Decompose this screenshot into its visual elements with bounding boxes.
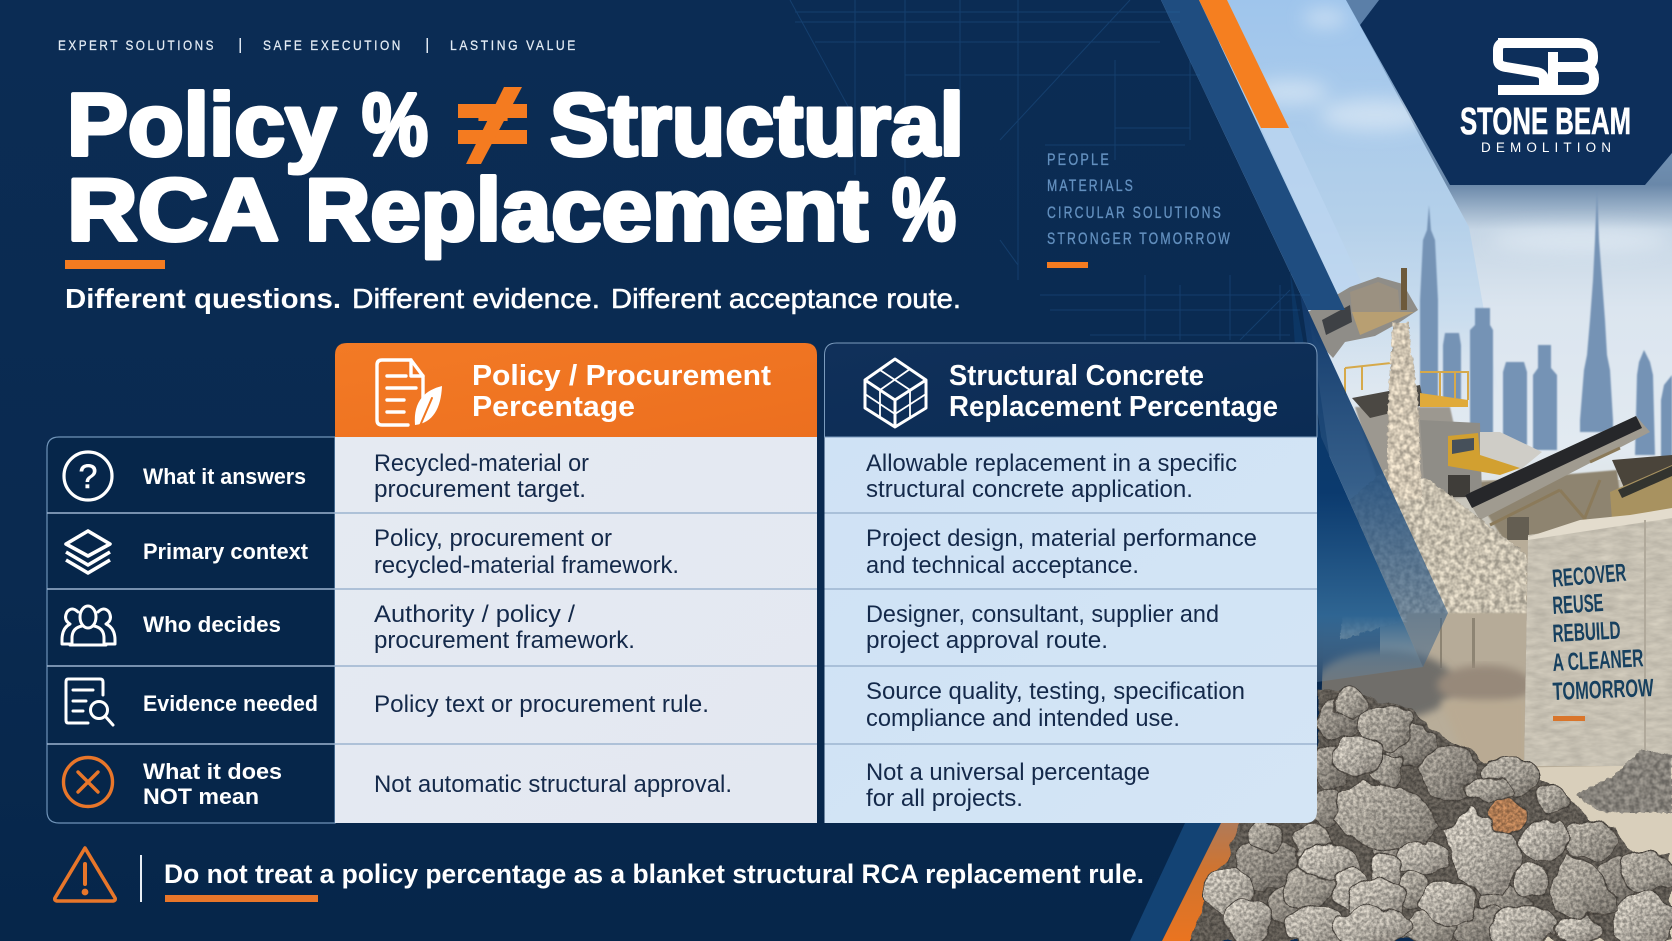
not-equal sign (458, 87, 527, 164)
row: evidence needed: compliance and intended use. (866, 705, 1180, 732)
logo panel (1346, 0, 1672, 185)
title (67, 75, 964, 259)
icon: structural cube (865, 359, 926, 427)
icon: question mark: ? (79, 458, 97, 496)
title: Policy (67, 75, 336, 174)
bottom orange stripe (1162, 823, 1246, 941)
row: primary context: Policy, procurement or (374, 525, 612, 552)
row: who decides: Authority / policy / (374, 601, 575, 628)
title: Replacement (305, 160, 868, 259)
light strip under orange stripe (1261, 128, 1365, 293)
row: evidence needed: Evidence needed (143, 691, 318, 716)
row: what it answers: procurement target. (374, 476, 586, 503)
heading: structural column (949, 360, 1278, 423)
panel: structural column header (824, 343, 1317, 437)
heading: policy column: Policy / Procurement (472, 360, 771, 392)
not-equal sign: ≠ (478, 93, 508, 156)
bottom blue band (1130, 823, 1221, 941)
logo mark (1498, 43, 1594, 90)
photo: city skyline (1420, 188, 1672, 458)
row: primary context: recycled-material framework. (374, 552, 679, 579)
icon: document with magnifier (66, 679, 113, 725)
row: what it does not mean: Not a universal percentage (866, 759, 1150, 786)
photo: ground and distant structures (1380, 470, 1672, 780)
side tagline (1047, 150, 1232, 268)
subtitle: Different evidence. (352, 283, 600, 314)
title: % (892, 160, 956, 259)
conveyor: main (1465, 416, 1650, 530)
icon: document with leaf (377, 360, 442, 428)
photo: sky (1150, 0, 1672, 560)
slogan (1551, 559, 1654, 706)
slogan: REUSE (1552, 589, 1604, 620)
side tagline: STRONGER TOMORROW (1047, 229, 1232, 248)
subtitle: Different acceptance route. (611, 283, 961, 314)
foreground rubble: ground (1490, 750, 1672, 941)
row: what it does not mean: What it does (143, 759, 282, 784)
title: % (362, 75, 428, 174)
title: Structural (550, 75, 964, 174)
row: what it does not mean: for all projects. (866, 785, 1023, 812)
row: primary context (66, 525, 1257, 579)
row: evidence needed (66, 678, 1245, 732)
main navy panel (0, 0, 1330, 941)
heading: policy column: Percentage (472, 391, 635, 423)
slogan: REBUILD (1552, 616, 1621, 648)
row: what it answers: Allowable replacement in a specific (866, 450, 1237, 477)
row: primary context: and technical acceptance. (866, 552, 1139, 579)
photo: gravel pile and falling stream (1340, 322, 1527, 640)
panel: structural column body (824, 437, 1317, 823)
side tagline: PEOPLE (1047, 150, 1111, 169)
logo sub-wordmark: DEMOLITION (1481, 140, 1611, 155)
tagline strip: SAFE EXECUTION (263, 37, 403, 53)
conveyor: right (1610, 455, 1672, 520)
tagline strip: LASTING VALUE (450, 37, 578, 53)
subtitle (65, 283, 961, 314)
row: primary context: Project design, material performance (866, 525, 1257, 552)
photo: light blue diagonal overlay (1200, 0, 1500, 400)
blueprint grid lines (790, 0, 1310, 340)
photo: low wall and blurred rubble (1315, 613, 1533, 770)
heading: structural column: Structural Concrete (949, 360, 1204, 392)
row: who decides: Designer, consultant, supplier and (866, 601, 1219, 628)
heading: structural column: Replacement Percentage (949, 391, 1278, 423)
icon: layers (66, 531, 110, 573)
foreground rubble pile (1190, 687, 1672, 941)
medium blue band (1161, 0, 1345, 310)
row labels panel (47, 437, 335, 823)
row: what it does not mean (64, 758, 1150, 812)
dark panel right of table (1290, 270, 1423, 682)
title: RCA (67, 160, 279, 259)
subtitle: Different questions. (65, 283, 341, 314)
row: evidence needed: Source quality, testing, specification (866, 678, 1245, 705)
row: who decides (62, 601, 1219, 654)
photo: crusher machinery and conveyors (1308, 268, 1672, 530)
clouds (1252, 9, 1670, 252)
icon: orange cross circle (64, 758, 112, 806)
row: who decides: Who decides (143, 612, 281, 637)
icon: people (62, 606, 115, 645)
comparison table (47, 343, 1317, 823)
row: what it does not mean: Not automatic structural approval. (374, 771, 732, 798)
panel: policy column header (335, 343, 817, 437)
warning callout (55, 848, 1144, 902)
row: what it answers: What it answers (143, 464, 306, 489)
row: what it does not mean: NOT mean (143, 784, 259, 809)
warning callout: Do not treat a policy percentage as a blanket structural RCA replacement rule. (164, 859, 1144, 889)
row: evidence needed: Policy text or procurement rule. (374, 691, 709, 718)
icon: question mark (64, 452, 112, 500)
panel: policy column body (335, 437, 817, 823)
orange diagonal stripe (1199, 0, 1289, 128)
icon: warning triangle (55, 848, 115, 901)
tagline strip: EXPERT SOLUTIONS (58, 37, 216, 53)
row: primary context: Primary context (143, 539, 309, 564)
side tagline: CIRCULAR SOLUTIONS (1047, 203, 1223, 222)
side tagline: MATERIALS (1047, 176, 1135, 195)
row: who decides: procurement framework. (374, 627, 635, 654)
title accent bar (65, 260, 165, 269)
heading: policy column (472, 360, 771, 423)
row: what it answers: structural concrete application. (866, 476, 1193, 503)
row: what it answers: Recycled-material or (374, 450, 589, 477)
tagline strip (58, 37, 578, 53)
block accent bar (1553, 716, 1585, 721)
photo: concrete block with slogan (1524, 508, 1672, 766)
row: what it answers (64, 450, 1237, 503)
translucent band over gravel (1300, 293, 1448, 667)
row: who decides: project approval route. (866, 627, 1108, 654)
